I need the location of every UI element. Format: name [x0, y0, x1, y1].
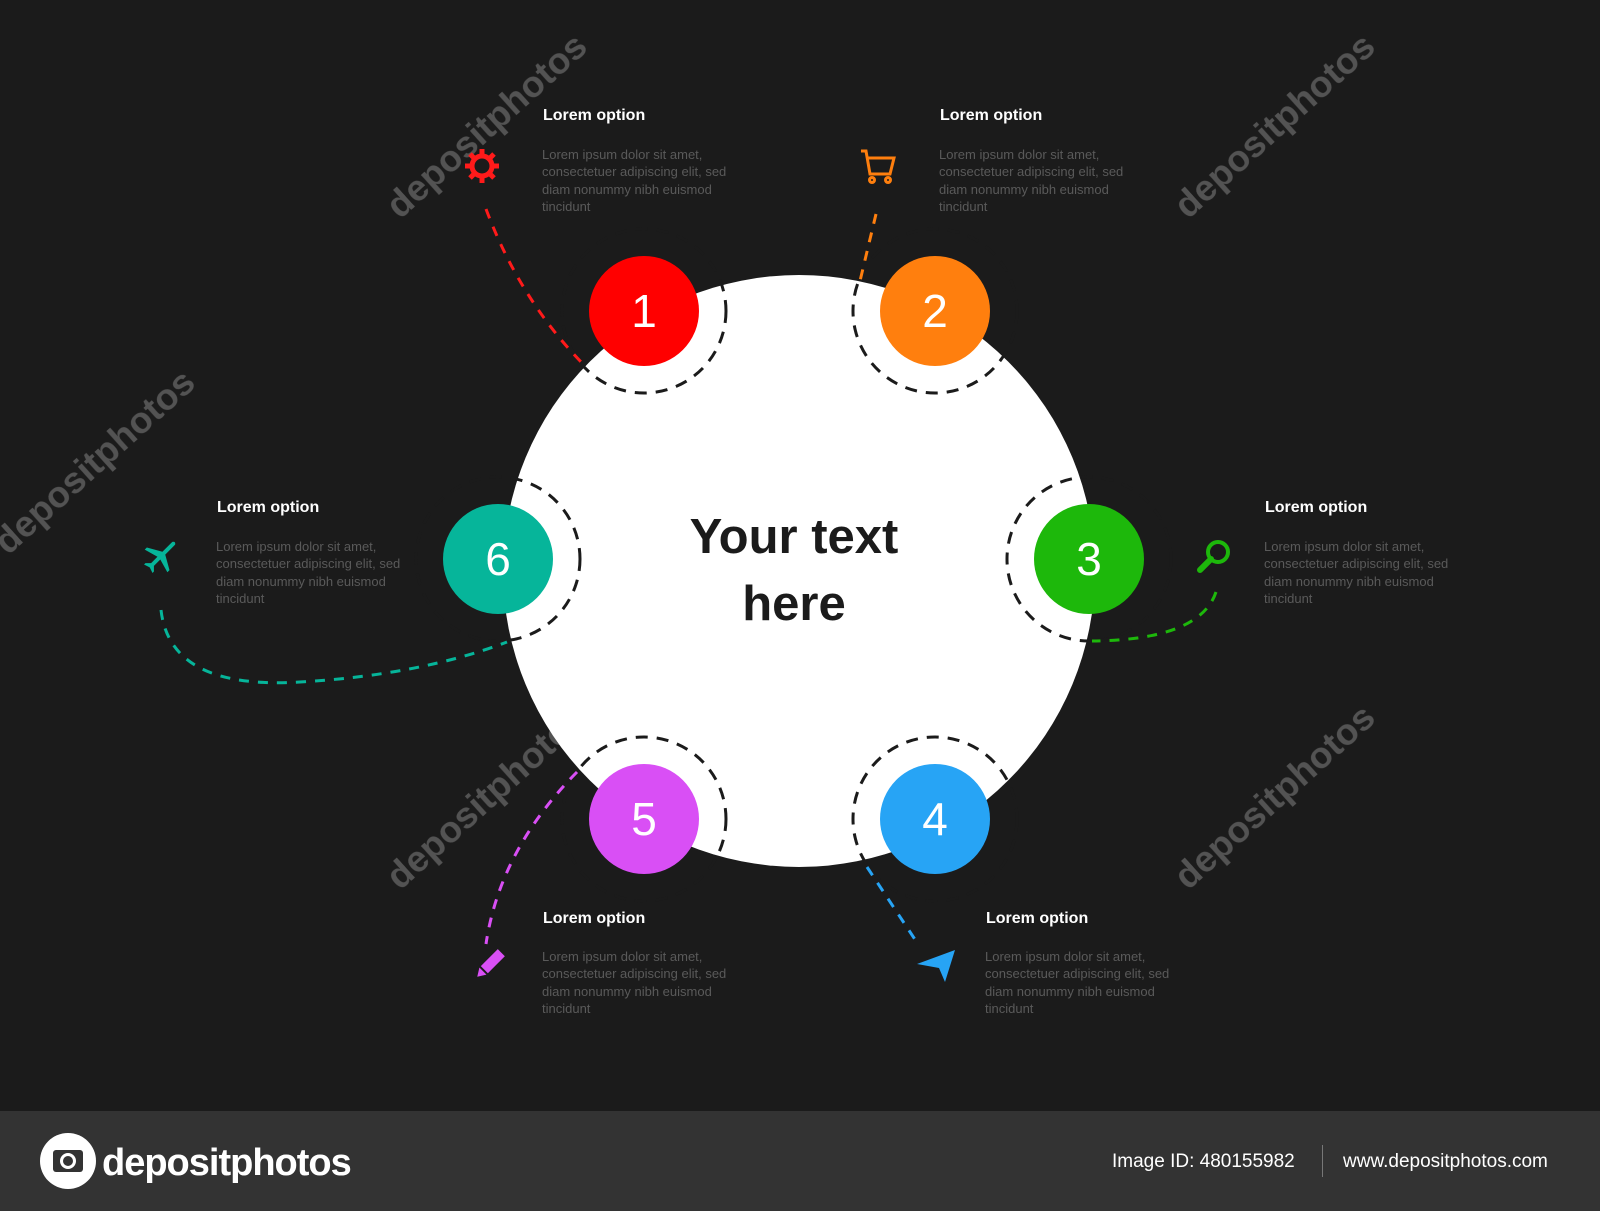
text: consectetuer adipiscing elit, sed [542, 966, 726, 981]
text: consectetuer adipiscing elit, sed [985, 966, 1169, 981]
footer: Image ID: 480155982 [1112, 1151, 1295, 1172]
icon: pencil [474, 949, 505, 980]
text: tincidunt [1264, 591, 1313, 606]
footer: depositphotos [102, 1142, 351, 1184]
text: consectetuer adipiscing elit, sed [1264, 556, 1448, 571]
watermarks: depositphotos [378, 25, 595, 226]
icon: magnifier [1200, 542, 1228, 570]
text blocks: Lorem option [986, 910, 1088, 927]
text blocks: Lorem option [543, 910, 645, 927]
watermarks: depositphotos [1166, 696, 1383, 897]
numbered circles: 5 [631, 793, 657, 845]
watermarks: depositphotos [378, 696, 595, 897]
text: consectetuer adipiscing elit, sed [542, 164, 726, 179]
text: Lorem ipsum dolor sit amet, [939, 147, 1099, 162]
text: diam nonummy nibh euismod [542, 984, 712, 999]
footer [0, 1111, 1600, 1211]
footer: www.depositphotos.com [1342, 1151, 1548, 1172]
text: diam nonummy nibh euismod [542, 182, 712, 197]
text: tincidunt [542, 1001, 591, 1016]
center text [690, 510, 898, 631]
numbered circles: 4 [922, 793, 948, 845]
text blocks: Lorem option [543, 107, 645, 124]
text: tincidunt [216, 591, 265, 606]
text: diam nonummy nibh euismod [1264, 574, 1434, 589]
text: diam nonummy nibh euismod [939, 182, 1109, 197]
numbered circles [443, 256, 1144, 874]
text blocks: Lorem option [940, 107, 1042, 124]
big white circle [503, 275, 1095, 867]
numbered circles: 6 [485, 533, 511, 585]
numbered circles: 3 [1076, 533, 1102, 585]
text: tincidunt [939, 199, 988, 214]
text blocks: Lorem option [1265, 499, 1367, 516]
text: Lorem ipsum dolor sit amet, [985, 949, 1145, 964]
icon: gear [465, 149, 499, 183]
connectors [161, 209, 1216, 944]
numbered circles: 1 [631, 285, 657, 337]
icon: paper plane [917, 950, 955, 982]
dashed rings [416, 229, 1171, 901]
center text: Your text [690, 510, 898, 564]
text: Lorem ipsum dolor sit amet, [1264, 539, 1424, 554]
text: diam nonummy nibh euismod [985, 984, 1155, 999]
text: Lorem ipsum dolor sit amet, [216, 539, 376, 554]
text blocks [217, 107, 1367, 927]
text: consectetuer adipiscing elit, sed [216, 556, 400, 571]
text: tincidunt [985, 1001, 1034, 1016]
text blocks: Lorem option [217, 499, 319, 516]
text: diam nonummy nibh euismod [216, 574, 386, 589]
text: Lorem ipsum dolor sit amet, [542, 949, 702, 964]
center text: here [742, 577, 846, 631]
text: consectetuer adipiscing elit, sed [939, 164, 1123, 179]
icon: cart [861, 151, 894, 182]
numbered circles: 2 [922, 285, 948, 337]
watermarks: depositphotos [1166, 25, 1383, 226]
icon: airplane [137, 531, 186, 580]
watermarks [0, 25, 1383, 897]
text: Lorem ipsum dolor sit amet, [542, 147, 702, 162]
text: tincidunt [542, 199, 591, 214]
